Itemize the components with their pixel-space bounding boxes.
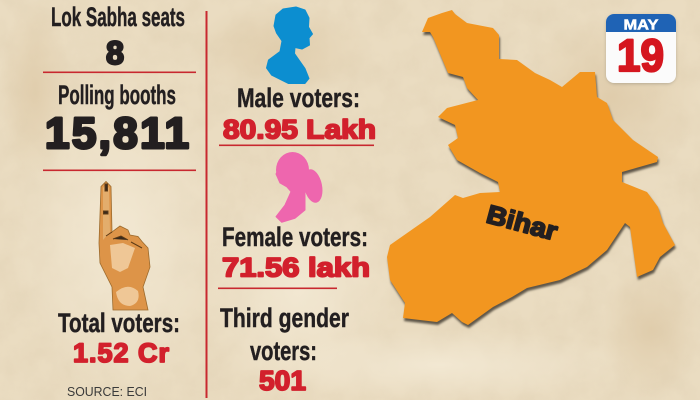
label: Female voters: Female voters:: [222, 222, 368, 252]
icon: calendar May 19: [606, 14, 676, 84]
panel: male voters: [219, 7, 376, 146]
panel: total voters: [58, 308, 180, 368]
heading: Polling booths: Polling booths: [58, 80, 176, 110]
label: Total voters: Total voters:: [58, 308, 180, 338]
calendar date: 19: [617, 30, 664, 81]
number: 71.56 lakh: 71.56 lakh: [222, 252, 370, 282]
label: Third gender voters: voters:: [250, 336, 317, 366]
icon: female silhouette: [276, 152, 325, 222]
number: 1.52 Cr: 1.52 Cr: [73, 338, 169, 368]
label: Male voters: Male voters:: [237, 83, 360, 113]
number: 501: 501: [259, 365, 306, 396]
vertical divider: [206, 11, 208, 398]
panel: seats and booths: [43, 2, 196, 171]
panel: female voters: [218, 152, 370, 289]
heading: Lok Sabha seats: Lok Sabha seats: [51, 2, 185, 32]
panel: third gender voters: [220, 303, 349, 396]
source note: SOURCE: ECI: [67, 384, 147, 399]
icon: male silhouette: [266, 7, 312, 84]
map label: Bihar: Bihar: [483, 199, 561, 246]
number: 8 seats: 8: [106, 35, 124, 71]
calendar month: MAY: [624, 18, 659, 34]
icon: inked finger hand: [99, 182, 150, 310]
label: Third gender voters: Third gender: [220, 303, 349, 333]
number: 80.95 Lakh: 80.95 Lakh: [223, 114, 376, 144]
number: 15,811 booths: 15,811: [45, 109, 189, 158]
